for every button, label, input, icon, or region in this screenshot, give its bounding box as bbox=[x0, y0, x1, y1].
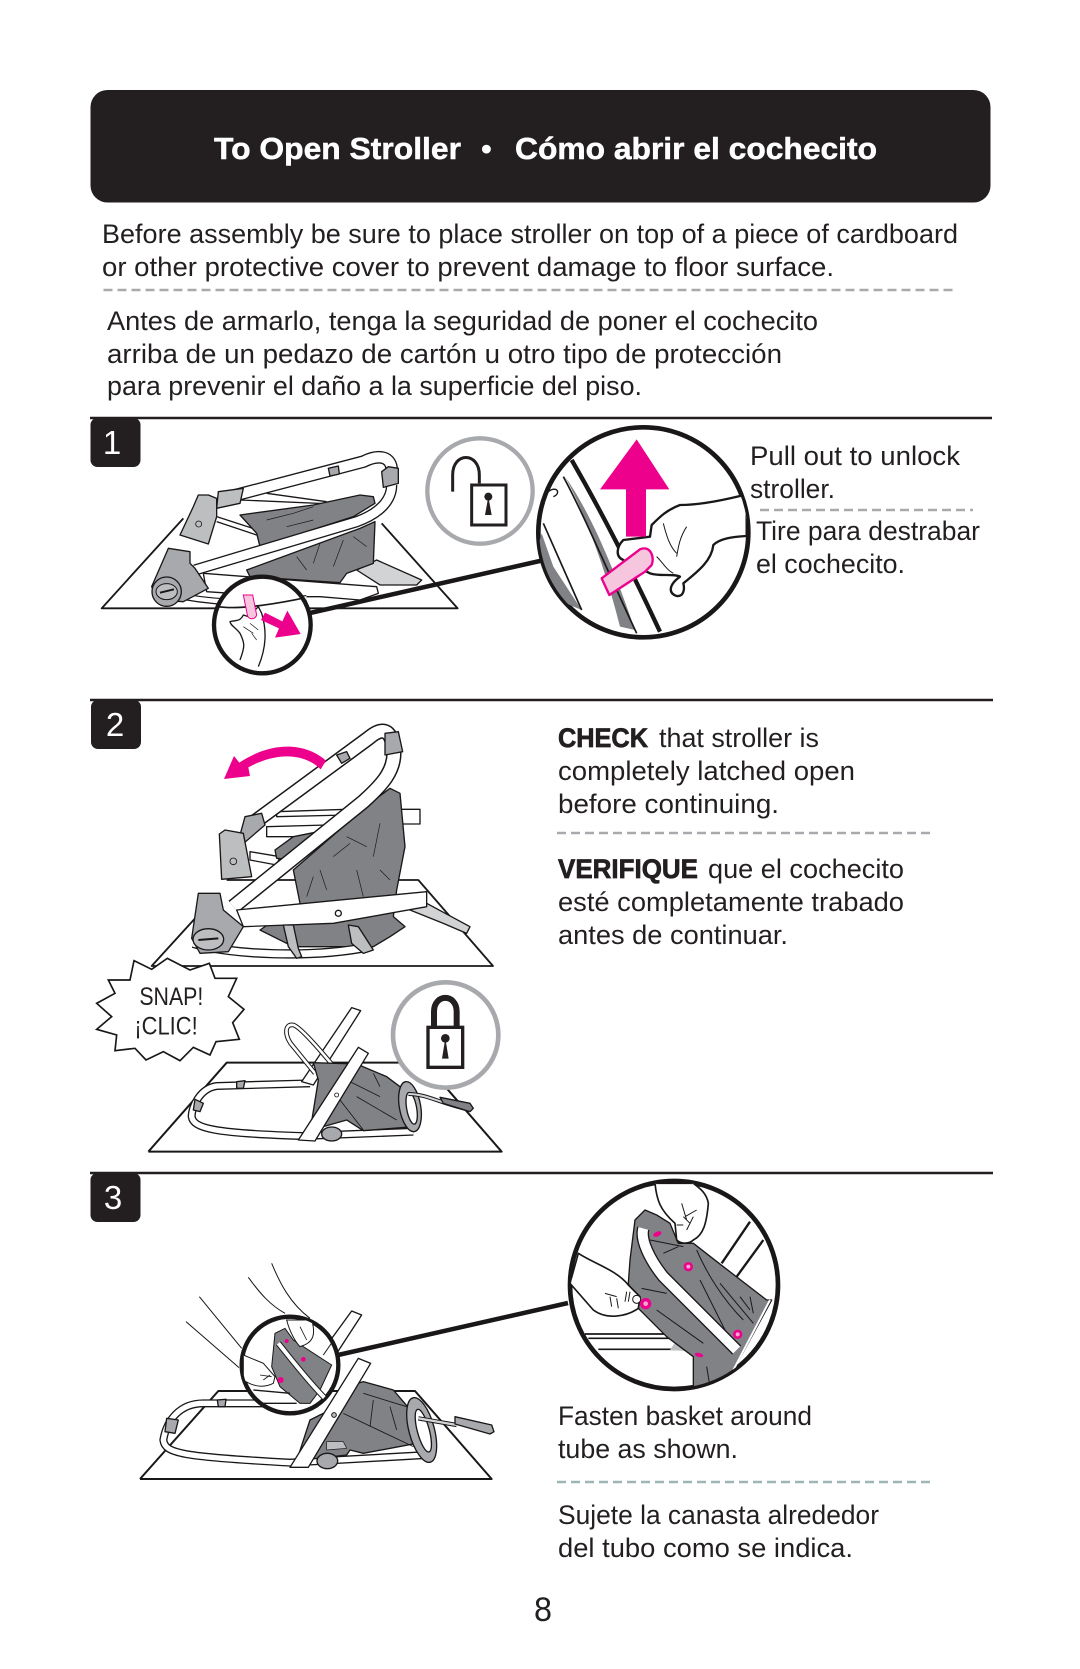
icon: open padlock bbox=[427, 438, 533, 544]
step 1 badge: 1 bbox=[103, 424, 121, 461]
step 1 instructions: Spanish: el cochecito. bbox=[756, 549, 905, 579]
callout: SNAP burst: ¡CLIC! bbox=[134, 1012, 198, 1040]
title text: Cómo abrir el cochecito bbox=[515, 131, 877, 166]
step 2 instructions: Spanish: VERIFIQUE bbox=[558, 854, 698, 884]
intro text: English: Before assembly be sure to place stroller on top of a piece of cardboard bbox=[102, 219, 958, 249]
step 1 instructions: Spanish: Tire para destrabar bbox=[756, 516, 980, 546]
intro text: English bbox=[102, 219, 958, 282]
title text: • bbox=[481, 131, 492, 166]
step 2 badge: 2 bbox=[106, 706, 124, 743]
intro text: English: or other protective cover to prevent damage to floor surface. bbox=[102, 252, 834, 282]
step 2 instructions: Spanish: esté completamente trabado bbox=[558, 887, 904, 917]
step 3 instructions: English: Fasten basket around bbox=[558, 1401, 812, 1431]
connector line to basket detail bbox=[338, 1303, 568, 1355]
step 1 instructions: English: Pull out to unlock bbox=[750, 441, 961, 471]
step 2 instructions: Spanish: que el cochecito bbox=[708, 854, 904, 884]
panel: step 1 bbox=[90, 418, 992, 673]
step 3 instructions: English bbox=[558, 1401, 812, 1464]
intro text: Spanish: arriba de un pedazo de cartón u otro tipo de protección bbox=[107, 339, 782, 369]
step 2 badge bbox=[91, 700, 141, 749]
step 3 instructions: Spanish: Sujete la canasta alrededor bbox=[558, 1500, 879, 1530]
title banner bbox=[90, 90, 990, 202]
callout: detail of pull latch with pink arrow bbox=[537, 427, 748, 637]
title text bbox=[214, 131, 877, 166]
step 3 instructions: Spanish: del tubo como se indica. bbox=[558, 1533, 853, 1563]
step 2 instructions: English: that stroller is bbox=[659, 723, 819, 753]
step 2 instructions: Spanish: antes de continuar. bbox=[558, 920, 788, 950]
step 2 instructions: Spanish bbox=[558, 854, 904, 950]
illustration: hands fastening basket on stroller bbox=[140, 1263, 494, 1479]
intro text: Spanish: para prevenir el daño a la superficie del piso. bbox=[107, 371, 642, 401]
step 3 badge bbox=[90, 1173, 140, 1222]
step 3 instructions: Spanish bbox=[558, 1500, 879, 1563]
callout: large basket detail circle bbox=[570, 1181, 778, 1389]
callout: hand pulling latch bbox=[214, 577, 311, 673]
page number: 8 bbox=[534, 1591, 552, 1629]
callout: small basket circle bbox=[242, 1317, 338, 1413]
step 1 instructions: English bbox=[750, 441, 961, 504]
intro text: Spanish bbox=[107, 306, 818, 401]
panel: step 3 bbox=[90, 1173, 993, 1563]
step 2 instructions: English: before continuing. bbox=[558, 789, 779, 819]
step 2 instructions: English: CHECK bbox=[558, 723, 648, 753]
panel: step 2 bbox=[90, 700, 993, 1152]
illustration: folded stroller on mat bbox=[102, 457, 458, 608]
step 3 instructions: English: tube as shown. bbox=[558, 1434, 738, 1464]
icon: closed padlock bbox=[393, 982, 498, 1088]
step 1 badge bbox=[90, 418, 140, 467]
callout: SNAP burst: SNAP! bbox=[139, 983, 203, 1011]
callout: SNAP burst bbox=[97, 958, 244, 1061]
title text: To Open Stroller bbox=[214, 131, 461, 166]
illustration: stroller unfolded flat on mat bbox=[148, 1008, 502, 1152]
connector line to detail circle bbox=[310, 560, 542, 613]
step 1 instructions: Spanish bbox=[756, 516, 980, 579]
intro text: Spanish: Antes de armarlo, tenga la seguridad de poner el cochecito bbox=[107, 306, 818, 336]
step 2 instructions: English bbox=[558, 723, 855, 819]
step 2 instructions: English: completely latched open bbox=[558, 756, 855, 786]
step 1 instructions: English: stroller. bbox=[750, 474, 835, 504]
step 3 badge: 3 bbox=[104, 1179, 122, 1216]
illustration: stroller half open with pink arrow bbox=[152, 731, 493, 966]
